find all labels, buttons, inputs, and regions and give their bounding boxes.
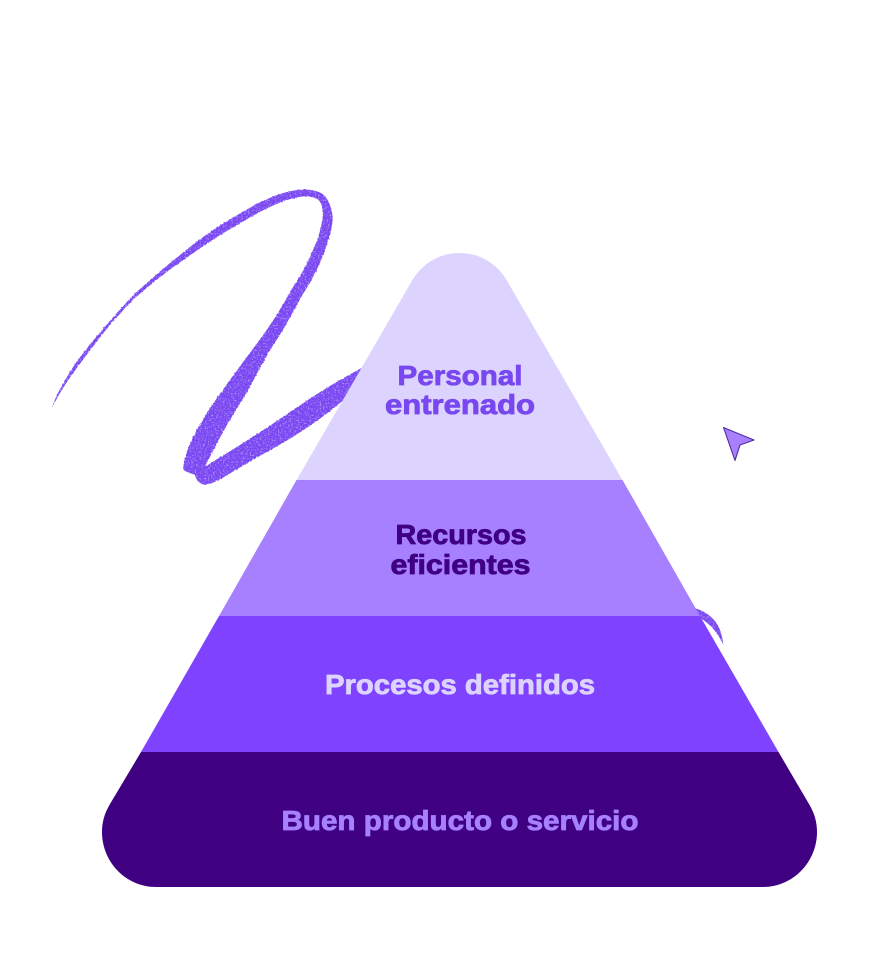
tier 2: Recursos eficientes — [219, 480, 700, 616]
brush stroke scribble — [52, 190, 723, 644]
icon: cursor arrow — [724, 428, 754, 460]
pyramid — [102, 253, 817, 887]
tier 1: Personal entrenado: entrenado — [385, 389, 535, 420]
tier 4: Buen producto o servicio: Buen producto o servicio — [282, 805, 638, 836]
tier 2: Recursos eficientes: eficientes — [390, 549, 530, 580]
tier 1: Personal entrenado: Personal — [398, 360, 522, 391]
tier 2: Recursos eficientes: Recursos — [396, 519, 526, 550]
tier 4: Buen producto o servicio — [102, 752, 817, 887]
tier 3: Procesos definidos: Procesos definidos — [325, 669, 595, 700]
tier 1: Personal entrenado — [296, 253, 623, 481]
tier 3: Procesos definidos — [141, 616, 778, 752]
